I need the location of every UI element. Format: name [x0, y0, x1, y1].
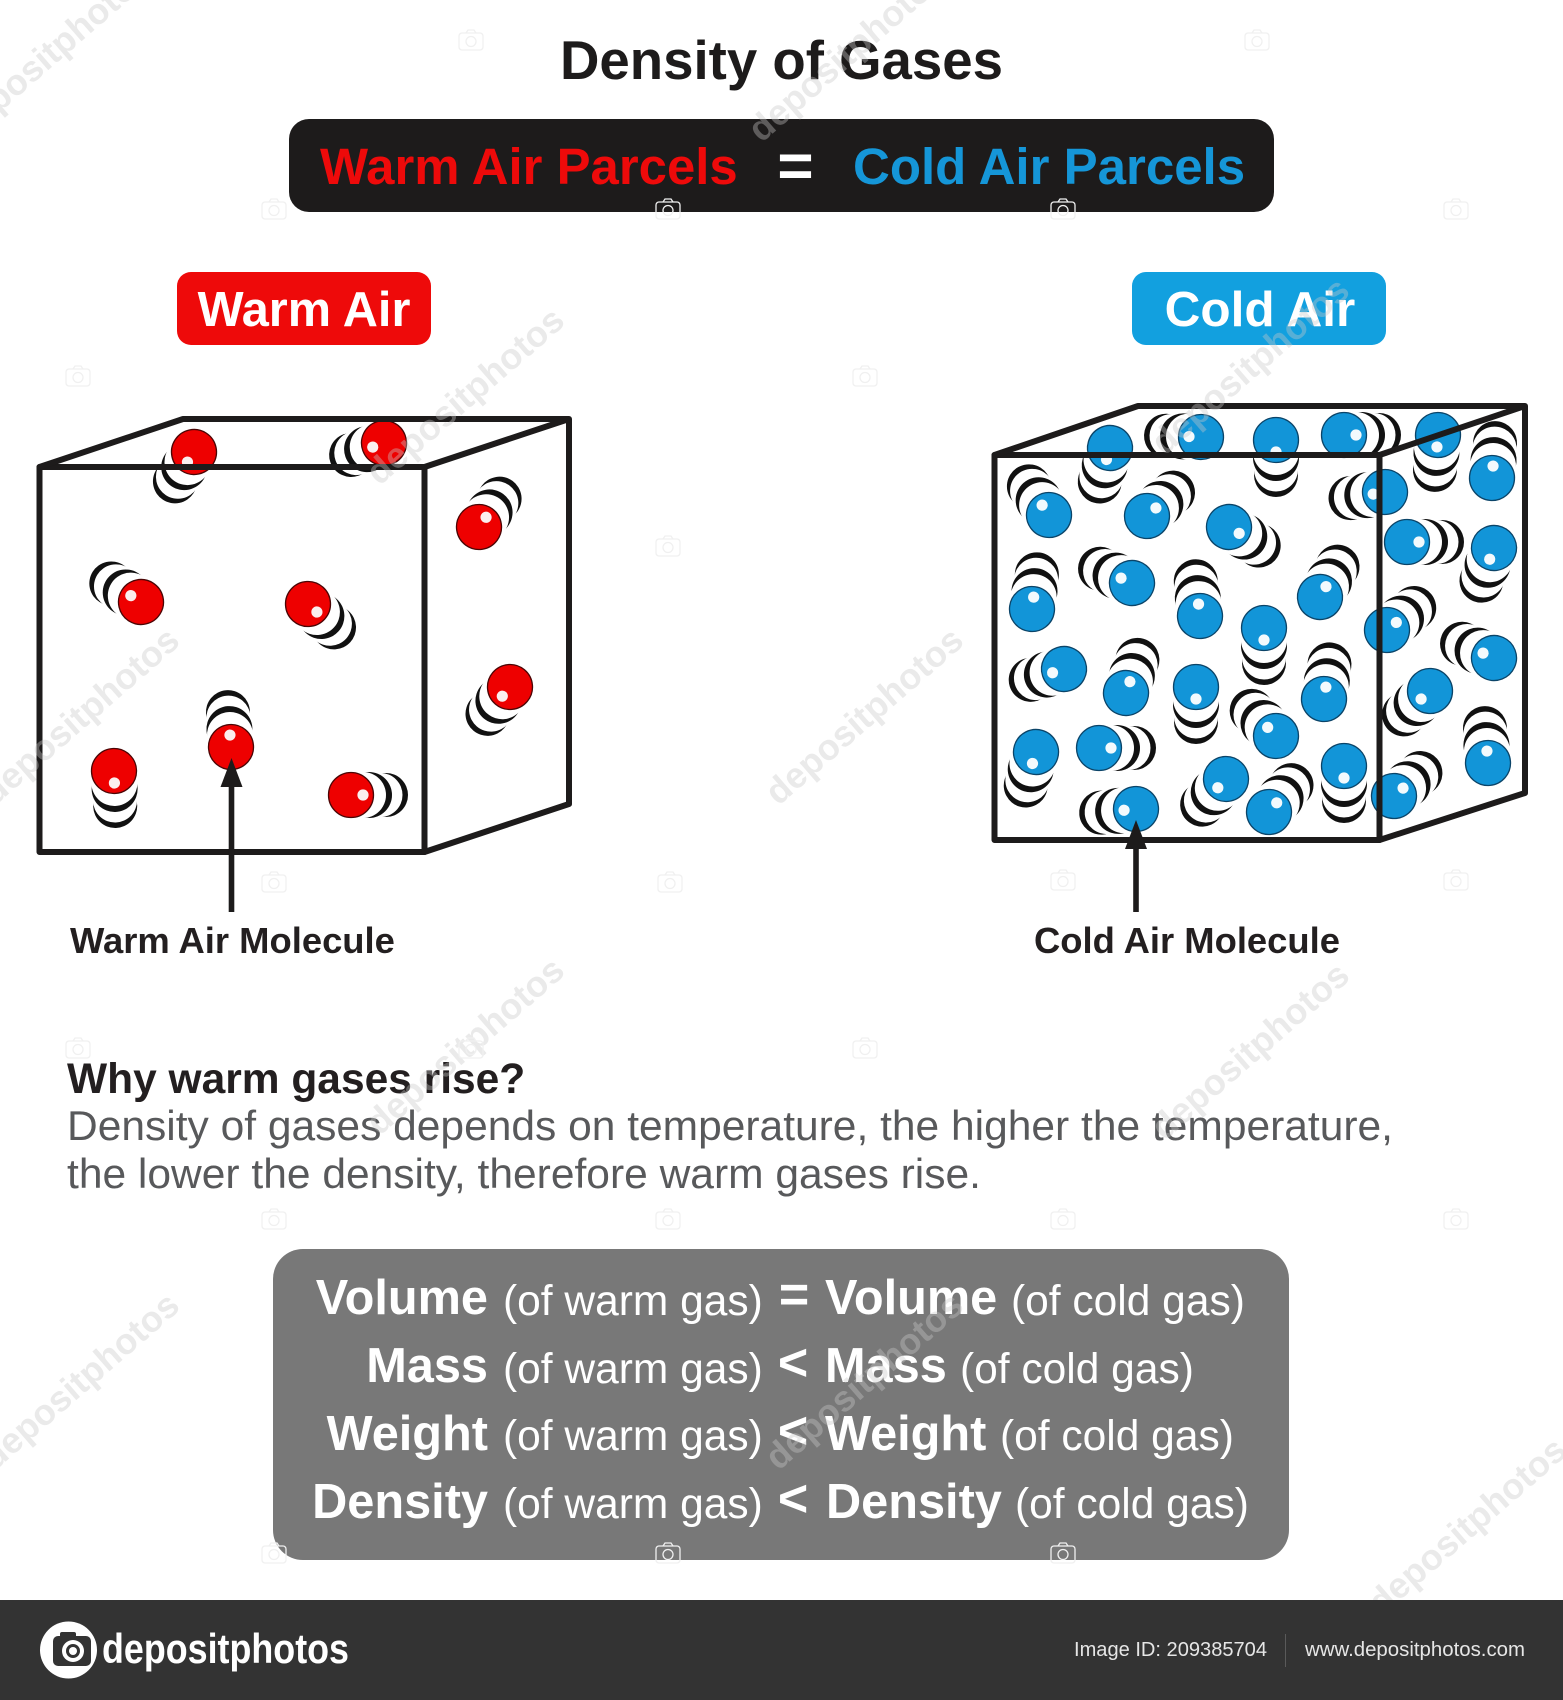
row: volume: (of cold gas) — [1011, 1278, 1245, 1325]
row: mass: (of warm gas) — [503, 1346, 763, 1393]
row: weight: < — [778, 1402, 808, 1460]
row: volume: = — [779, 1266, 809, 1324]
panel: cold air cube with molecules — [994, 406, 1525, 844]
cold air cube outline — [994, 406, 1525, 840]
row: volume: Volume — [316, 1271, 488, 1325]
text block: explanation — [67, 1102, 1393, 1197]
row: mass: < — [778, 1334, 808, 1392]
row: weight: Weight — [825, 1407, 986, 1461]
watermark pattern: depositphotos — [358, 949, 572, 1142]
row: density: (of warm gas) — [503, 1481, 763, 1528]
watermark pattern: depositphotos — [757, 619, 971, 812]
logo wordmark: depositphotos — [102, 1625, 349, 1672]
row: weight — [327, 1402, 1234, 1461]
banner: warm air parcels equals cold air parcels — [289, 119, 1274, 212]
icon: camera logo — [40, 1622, 97, 1678]
badge: cold air — [1132, 272, 1386, 345]
arrow: warm air molecule — [220, 758, 242, 912]
footer bar — [0, 1600, 1563, 1700]
warm air cube outline — [40, 419, 569, 852]
image id: Image ID: 209385704 — [1074, 1639, 1267, 1661]
text block: explanation: Density of gases depends on temperature, the higher the temperature, — [67, 1102, 1393, 1149]
row: volume: (of warm gas) — [503, 1278, 763, 1325]
row: density — [312, 1470, 1249, 1529]
panel: comparison of warm and cold gas — [273, 1249, 1289, 1560]
panel: warm air cube with molecules — [40, 414, 569, 852]
watermark pattern: depositphotos — [757, 1284, 971, 1477]
label: warm air molecule: Warm Air Molecule — [70, 920, 395, 961]
banner: warm air parcels equals cold air parcels: = — [777, 132, 814, 201]
watermark pattern: depositphotos — [1143, 269, 1357, 462]
label: cold air molecule: Cold Air Molecule — [1034, 920, 1340, 961]
text block: explanation: the lower the density, therefore warm gases rise. — [67, 1150, 981, 1197]
heading: why warm gases rise: Why warm gases rise? — [67, 1056, 525, 1103]
watermark pattern: depositphotos — [358, 299, 572, 492]
row: mass: (of cold gas) — [960, 1346, 1194, 1393]
banner: warm air parcels equals cold air parcels: Cold Air Parcels — [853, 138, 1245, 195]
row: volume — [316, 1266, 1245, 1325]
row: mass: Mass — [366, 1339, 488, 1393]
row: density: Density — [826, 1475, 1002, 1529]
row: density: Density — [312, 1475, 488, 1529]
row: density: (of cold gas) — [1015, 1481, 1249, 1528]
badge: warm air: Warm Air — [198, 283, 410, 337]
row: weight: (of cold gas) — [1000, 1413, 1234, 1460]
row: density: < — [778, 1470, 808, 1528]
row: mass: Mass — [825, 1339, 947, 1393]
row: weight: (of warm gas) — [503, 1413, 763, 1460]
cold air molecules — [997, 411, 1524, 844]
row: weight: Weight — [327, 1407, 488, 1461]
website address: www.depositphotos.com — [1304, 1639, 1525, 1661]
badge: warm air — [177, 272, 431, 345]
row: volume: Volume — [825, 1271, 997, 1325]
title: Density of Gases — [560, 30, 1003, 91]
arrow: cold air molecule — [1125, 820, 1147, 912]
warm air molecules — [80, 414, 542, 829]
banner: warm air parcels equals cold air parcels: Warm Air Parcels — [320, 138, 738, 195]
badge: cold air: Cold Air — [1165, 282, 1355, 337]
watermark pattern: depositphotos — [1143, 954, 1357, 1147]
row: mass — [366, 1334, 1194, 1393]
